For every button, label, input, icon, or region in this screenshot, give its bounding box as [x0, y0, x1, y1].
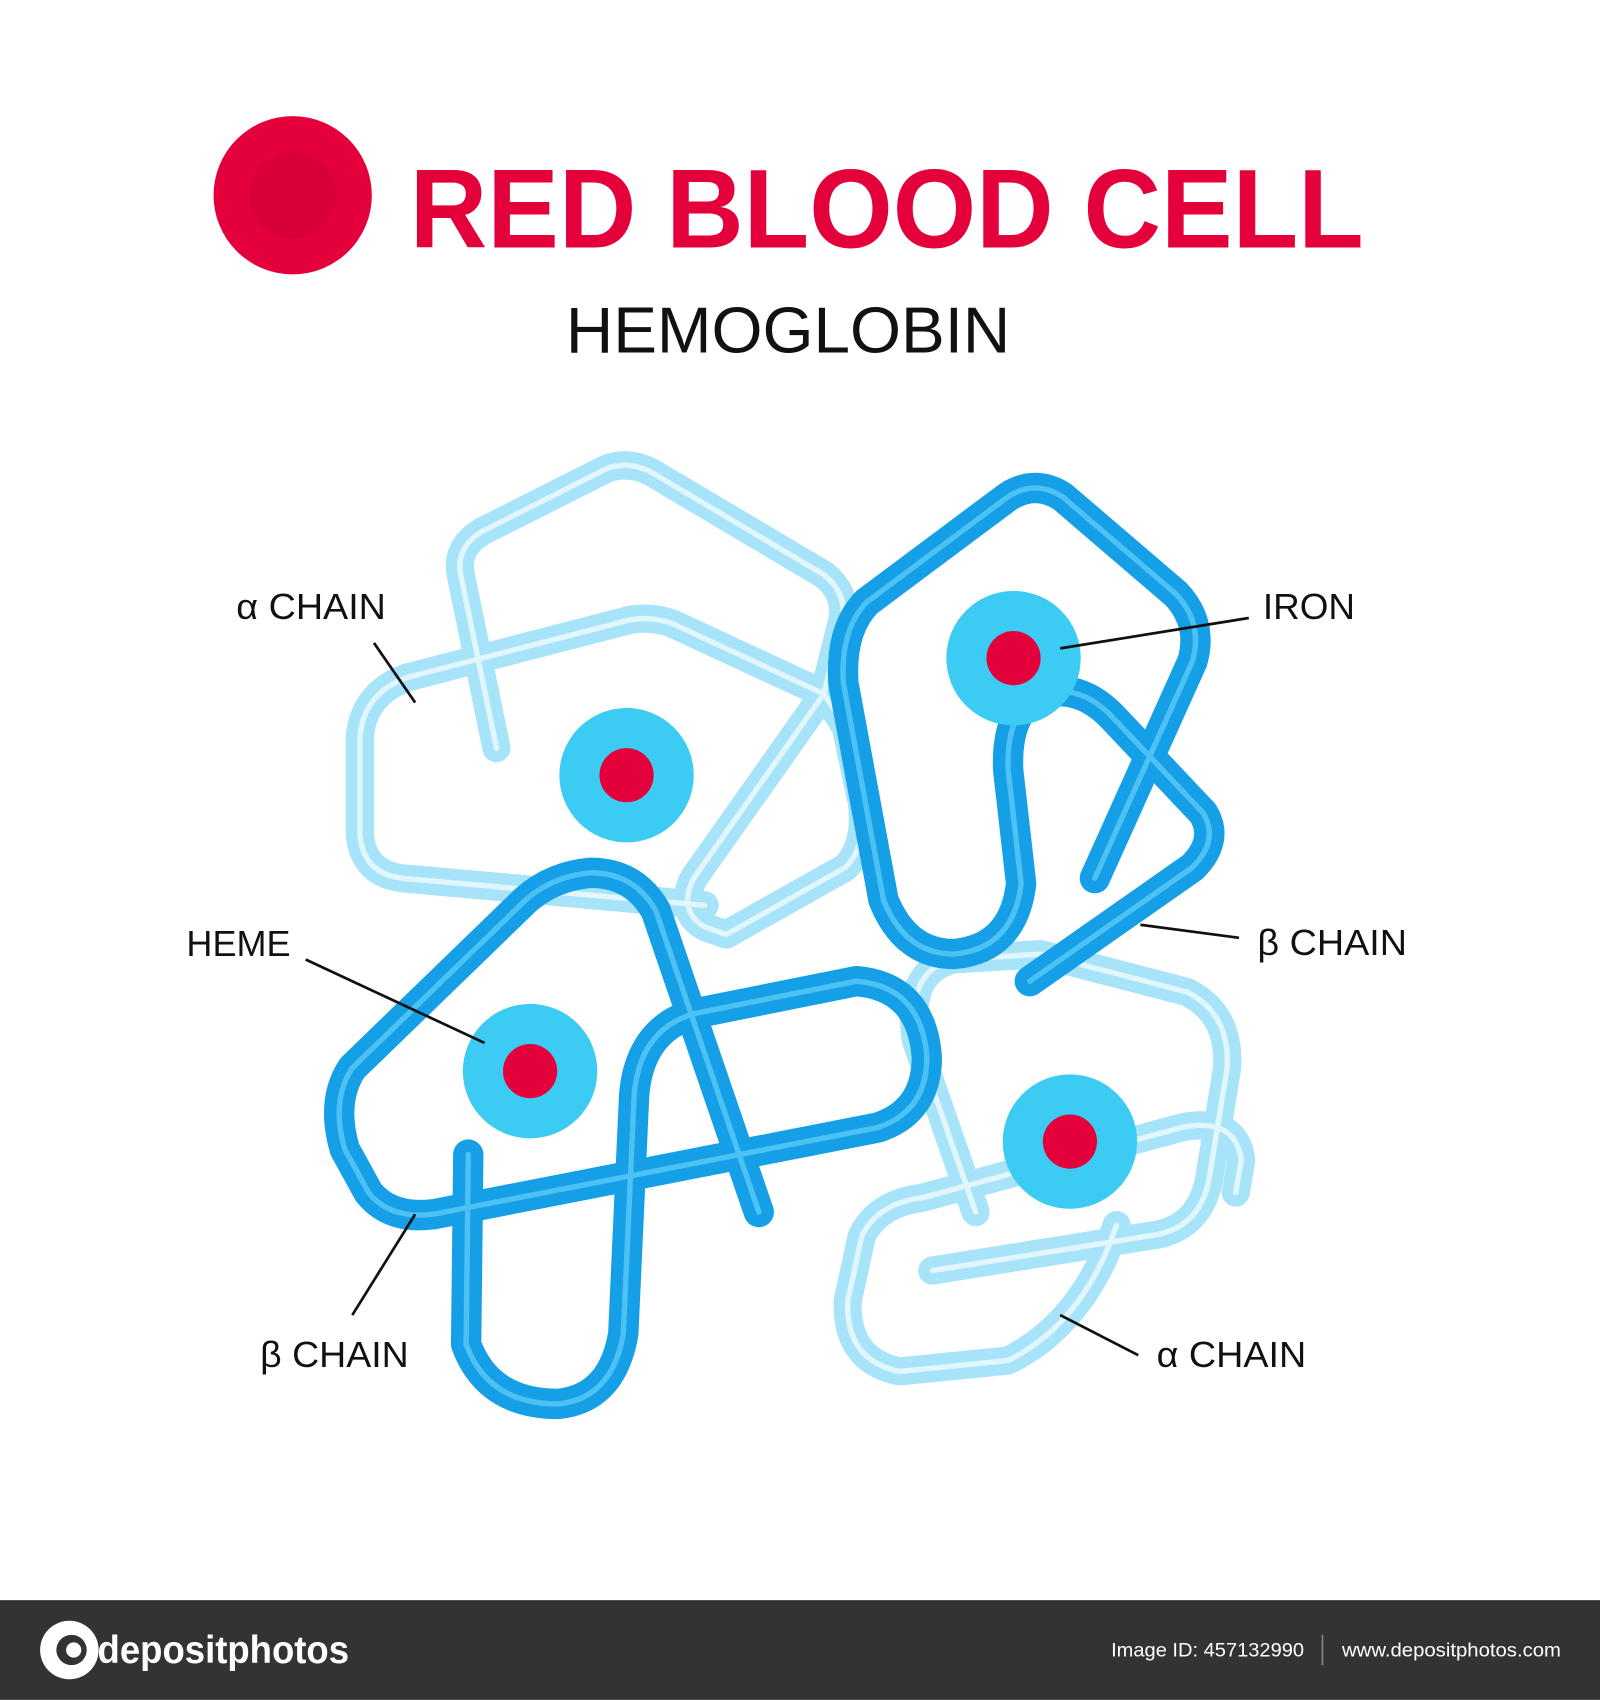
- label: beta chain right: β CHAIN: [1257, 923, 1407, 963]
- heme: top-left: [559, 708, 694, 842]
- label: heme: [186, 924, 485, 1043]
- label: alpha chain bottom: [1060, 1315, 1306, 1375]
- footer logo: [40, 1621, 99, 1679]
- title: RED BLOOD CELL: [410, 145, 1364, 271]
- label: heme: HEME: [186, 924, 291, 964]
- icon: red blood cell: [214, 116, 372, 274]
- chain: top-right beta (dark): [843, 488, 1209, 981]
- subtitle: HEMOGLOBIN: [566, 293, 1010, 366]
- label: alpha chain bottom: α CHAIN: [1157, 1335, 1306, 1375]
- label: beta chain right: [1140, 923, 1407, 963]
- heme: top-right: [946, 591, 1081, 725]
- label: iron: IRON: [1263, 587, 1355, 627]
- label: alpha chain top: [236, 587, 415, 703]
- heme groups: [463, 591, 1137, 1209]
- label: beta chain bottom: [260, 1214, 415, 1375]
- chain: top-left alpha (light): [360, 465, 863, 935]
- chain: bottom-right alpha (light): [848, 954, 1241, 1371]
- heme: bottom-left: [463, 1004, 597, 1138]
- label: iron: [1060, 587, 1355, 648]
- diagram: hemoglobin: [339, 465, 1241, 1404]
- footer bar: [0, 1600, 1600, 1700]
- heme: bottom-right: [1003, 1074, 1137, 1209]
- footer bar: depositphotos: [98, 1629, 349, 1672]
- label: beta chain bottom: β CHAIN: [260, 1335, 409, 1375]
- footer bar: www.depositphotos.com: [1341, 1640, 1561, 1662]
- footer bar: Image ID: 457132990: [1111, 1640, 1304, 1662]
- label: alpha chain top: α CHAIN: [236, 587, 386, 627]
- chain: bottom-left beta (dark): [339, 873, 927, 1404]
- labels: [186, 587, 1407, 1375]
